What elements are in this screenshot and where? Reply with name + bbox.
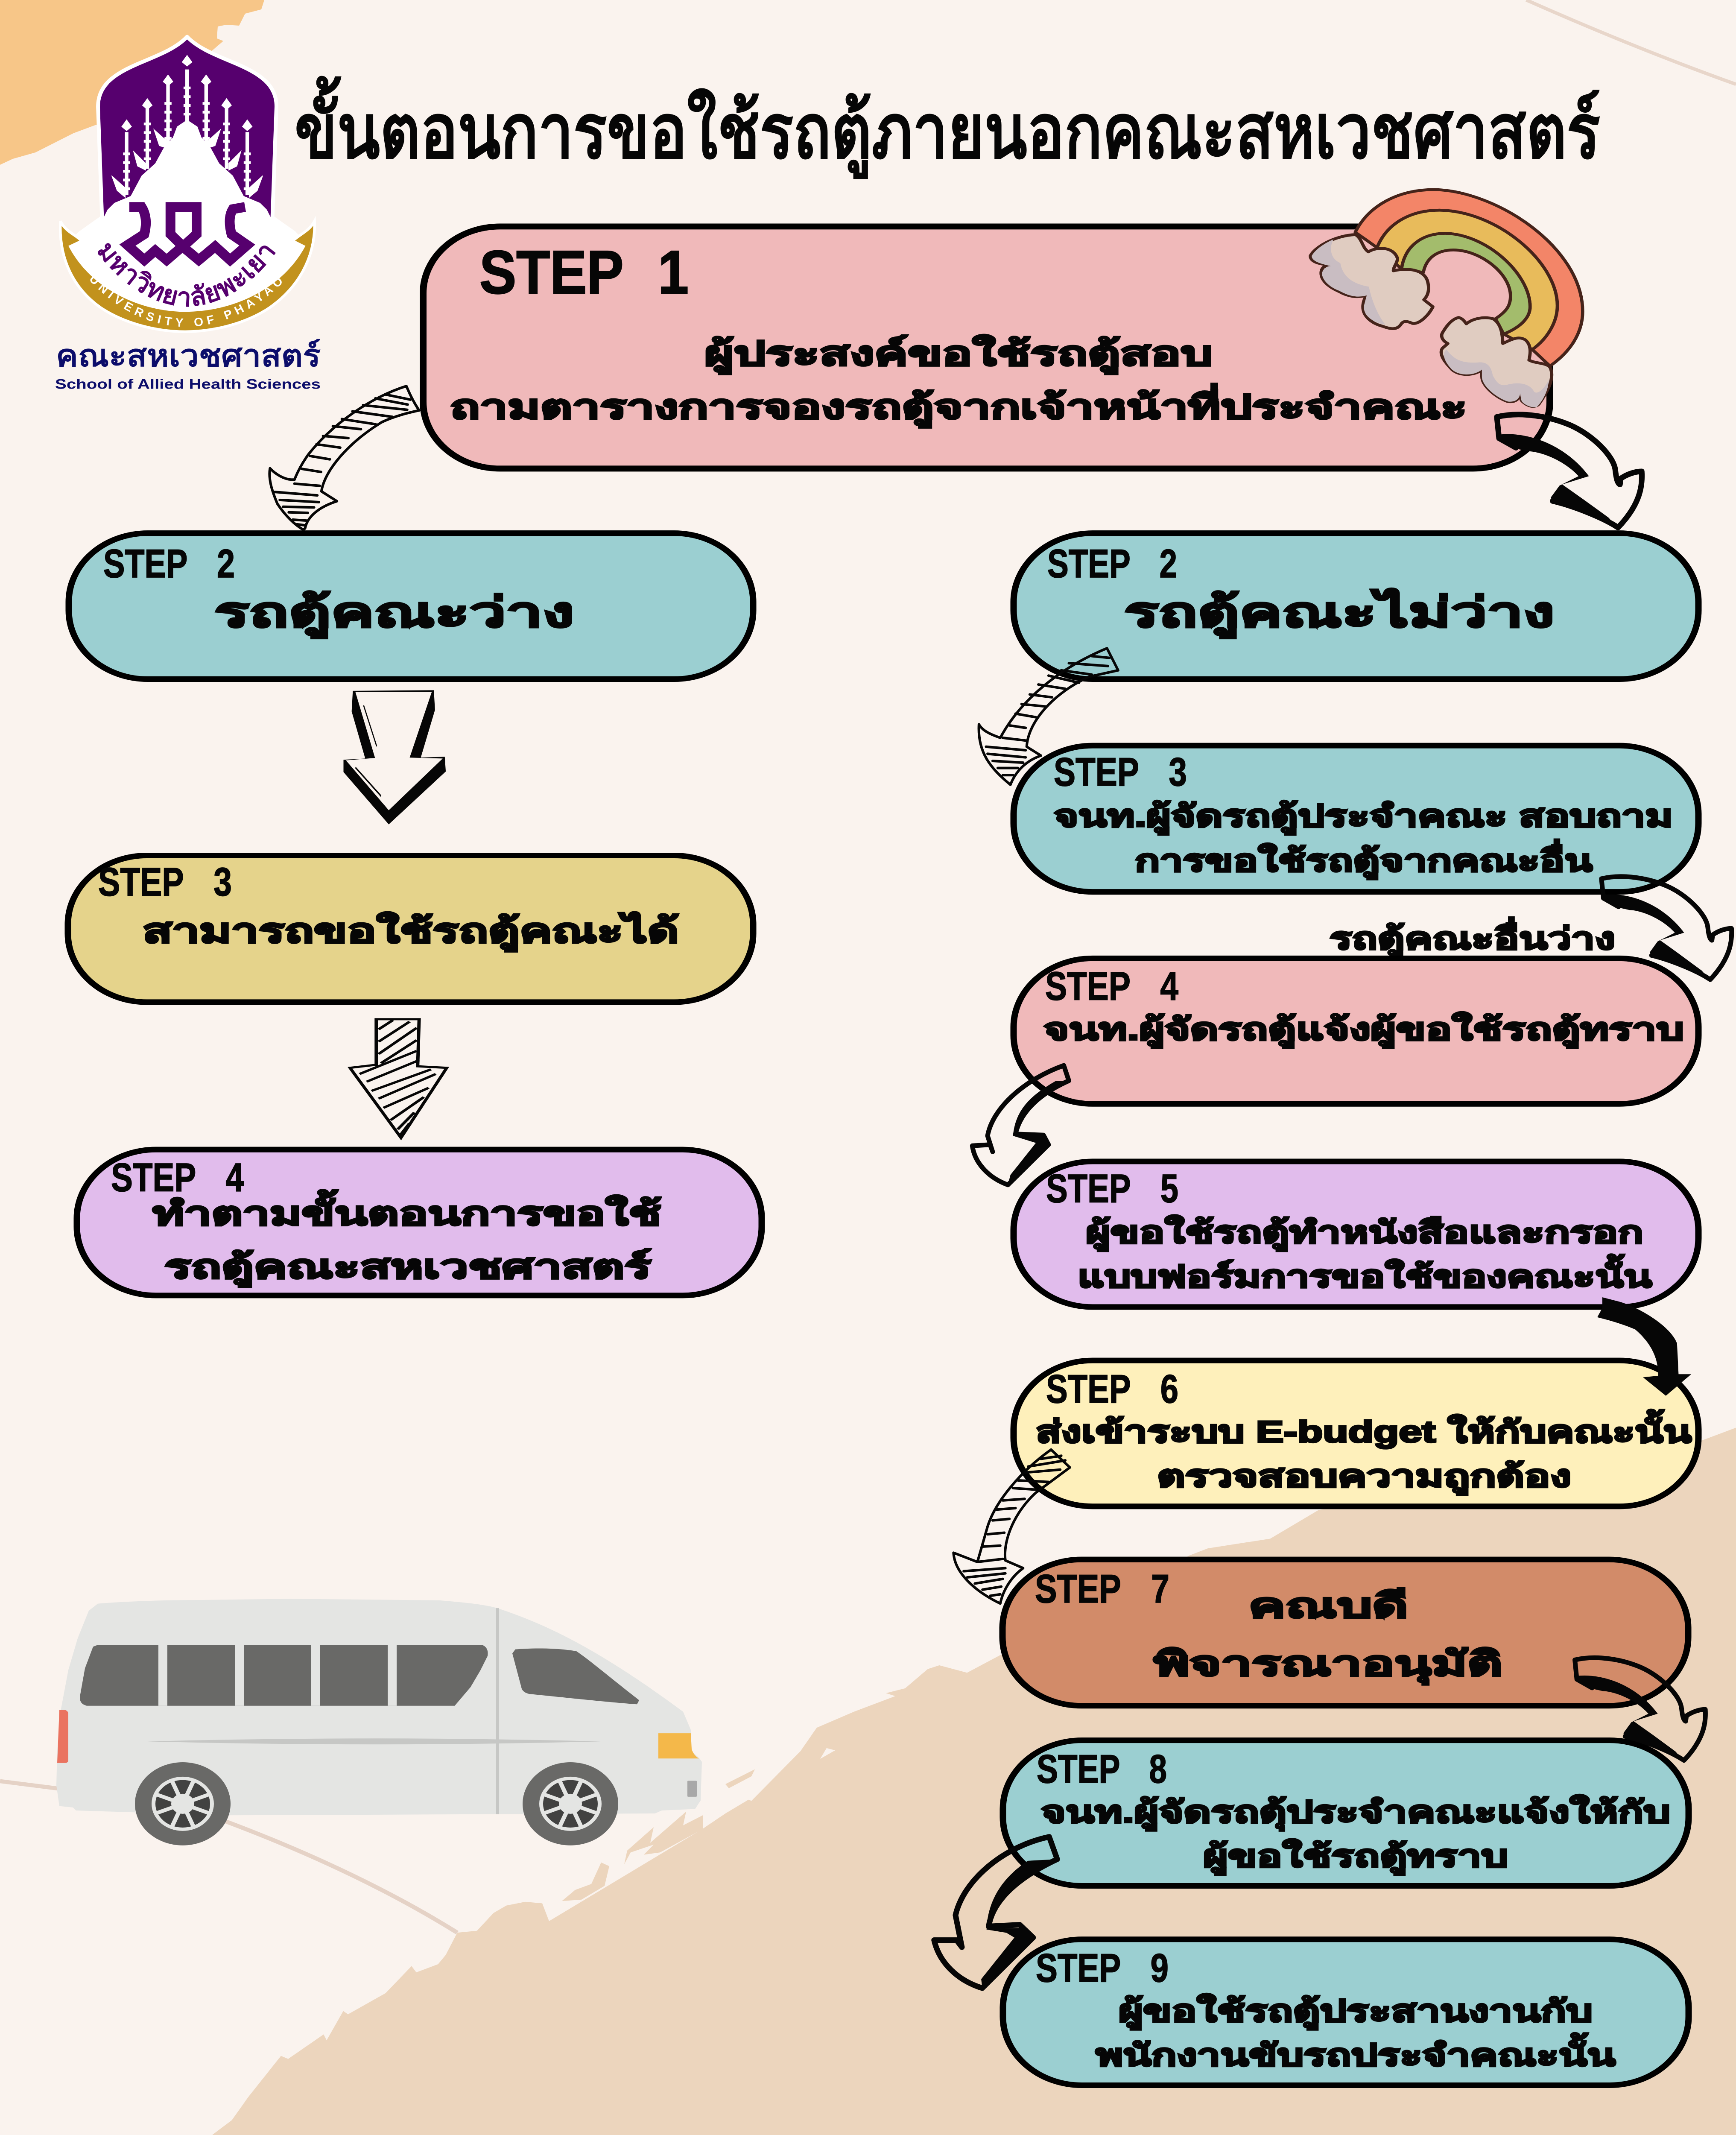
right step 7 text line 1: คณบดี bbox=[1248, 1587, 1408, 1625]
logo: university crest bbox=[60, 37, 315, 332]
right step 9 box bbox=[1003, 1939, 1689, 2085]
van body bbox=[56, 1599, 702, 1815]
step 1 text line 2: ถามตารางการจองรถตู้จากเจ้าหน้าที่ประจำคณะ bbox=[450, 383, 1467, 428]
panel: right step 5 bbox=[1014, 1161, 1698, 1307]
arrow thick edge bbox=[1498, 434, 1618, 528]
arrow thick edge bbox=[1603, 895, 1710, 980]
van front window bbox=[512, 1648, 639, 1704]
arrow: left step 3 to step 4 (sketched) bbox=[350, 1019, 447, 1138]
right step 7 label: STEP 7 bbox=[1035, 1567, 1169, 1611]
right step 4 box bbox=[1014, 958, 1698, 1104]
van side windows bbox=[80, 1645, 488, 1706]
background: orange brush top-left bbox=[0, 0, 264, 165]
logo caption: faculty name english: School of Allied Health Sciences bbox=[55, 377, 321, 392]
right step 9 text line 1: ผู้ขอใช้รถตู้ประสานงานกับ bbox=[1119, 1993, 1593, 2030]
background curve bottom-left bbox=[0, 1781, 457, 1933]
panel: right step 7 bbox=[1002, 1559, 1688, 1706]
van body stripe bbox=[147, 1738, 601, 1744]
arrow: right step 7 to step 8 (curved) bbox=[1575, 1658, 1705, 1761]
panel: left step 4 bbox=[77, 1149, 762, 1296]
right step 4 label: STEP 4 bbox=[1045, 964, 1178, 1009]
arrow: right step 4 to step 5 (curved) bbox=[972, 1065, 1069, 1185]
panel: left step 2 bbox=[69, 533, 753, 679]
arrow outline bbox=[1602, 877, 1732, 980]
left cloud shadow bbox=[1312, 239, 1385, 325]
crest ribbon bbox=[60, 221, 315, 332]
right step 6 text line 1: ส่งเข้าระบบ E-budget ให้กับคณะนั้น bbox=[1036, 1409, 1692, 1449]
van head light bbox=[658, 1733, 699, 1758]
right step 3 label: STEP 3 bbox=[1054, 750, 1187, 794]
right step 8 label: STEP 8 bbox=[1037, 1746, 1167, 1791]
crest shield bbox=[98, 37, 276, 221]
right step 6 text line 2: ตรวจสอบความถูกต้อง bbox=[1157, 1459, 1571, 1495]
left step 3 label: STEP 3 bbox=[98, 860, 232, 904]
arrow thick edge bbox=[1008, 1081, 1069, 1185]
right step 5 text line 1: ผู้ขอใช้รถตู้ทำหนังสือและกรอก bbox=[1086, 1215, 1643, 1252]
van rear wheel bbox=[135, 1762, 231, 1845]
background: tan brush bottom-right bbox=[212, 1427, 1736, 2135]
arrow: right step 3 to step 4 (curved) bbox=[1602, 877, 1732, 980]
right step 9 text line 2: พนักงานขับรถประจำคณะนั้น bbox=[1096, 2033, 1616, 2072]
panel: step 1 bbox=[423, 226, 1550, 468]
background curve top-right bbox=[1526, 0, 1736, 84]
panel: right step 8 bbox=[1003, 1740, 1689, 1886]
step 1 box bbox=[423, 226, 1550, 468]
right step 8 text line 1: จนท.ผู้จัดรถตุ้ประจำคณะแจ้งให้กับ bbox=[1041, 1794, 1670, 1831]
right step 3 box bbox=[1014, 746, 1698, 892]
right step 2 label: STEP 2 bbox=[1047, 541, 1177, 586]
van tail light bbox=[57, 1710, 68, 1763]
arrow: step 1 to left step 2 (hatched) bbox=[269, 386, 419, 530]
right step 2 text: รถตู้คณะไม่ว่าง bbox=[1124, 588, 1555, 639]
right step 2 box bbox=[1014, 533, 1698, 679]
left step 4 text line 2: รถตู้คณะสหเวชศาสตร์ bbox=[164, 1249, 651, 1287]
panel: right step 6 bbox=[1014, 1360, 1698, 1506]
right step 5 box bbox=[1014, 1161, 1698, 1307]
crest english arc text: UNIVERSITY OF PHAYAO bbox=[87, 272, 288, 330]
arrow thick edge bbox=[981, 1859, 1057, 1988]
left step 2 box bbox=[69, 533, 753, 679]
right step 4 text: จนท.ผู้จัดรถตู้แจ้งผู้ขอใช้รถตู้ทราบ bbox=[1043, 1012, 1684, 1048]
rainbow green band bbox=[1402, 234, 1530, 334]
arrow: step 1 to right step 2 (curved) bbox=[1497, 415, 1642, 528]
crest monogram bbox=[127, 207, 247, 260]
panel: right step 3 bbox=[1014, 746, 1698, 892]
arrow highlight bbox=[355, 705, 381, 796]
arrow face bbox=[346, 692, 443, 810]
right step 8 text line 2: ผู้ขอใช้รถตู้ทราบ bbox=[1203, 1838, 1508, 1875]
arrow outline bbox=[1575, 1658, 1705, 1761]
van front wheel bbox=[523, 1762, 618, 1845]
left step 2 label: STEP 2 bbox=[103, 541, 235, 586]
step 1 label: STEP 1 bbox=[479, 238, 689, 307]
right step 5 text line 2: แบบฟอร์มการขอใช้ของคณะนั้น bbox=[1078, 1254, 1652, 1294]
step 1 text line 1: ผู้ประสงค์ขอใช้รถตู้สอบ bbox=[704, 334, 1213, 374]
right cloud bbox=[1441, 317, 1552, 407]
right step 9 label: STEP 9 bbox=[1036, 1945, 1169, 1990]
right step 3 text line 1: จนท.ผู้จัดรถตู้ประจำคณะ สอบถาม bbox=[1054, 799, 1673, 835]
arrow: right step 8 to step 9 (curved) bbox=[934, 1837, 1057, 1988]
illustration: white van bbox=[56, 1599, 702, 1845]
arrow outline bbox=[972, 1065, 1069, 1185]
icon: rainbow with clouds bbox=[1310, 190, 1583, 407]
van plate bbox=[687, 1781, 697, 1797]
background speck bbox=[820, 1748, 835, 1759]
right step 6 label: STEP 6 bbox=[1046, 1367, 1178, 1412]
van window pillars bbox=[158, 1645, 397, 1706]
arrow: left step 2 to step 3 (block) bbox=[343, 690, 446, 825]
right step 3 text line 2: การขอใช้รถตู้จากคณะอื่น bbox=[1135, 839, 1593, 880]
arrow: right step 6 to step 7 (hatched) bbox=[953, 1450, 1070, 1603]
left step 3 text: สามารถขอใช้รถตู้คณะได้ bbox=[143, 912, 679, 952]
arrow outline bbox=[1497, 415, 1642, 527]
left step 4 label: STEP 4 bbox=[111, 1155, 244, 1200]
arrow: right step 5 to step 6 (solid) bbox=[1597, 1297, 1691, 1396]
left step 4 box bbox=[77, 1149, 762, 1296]
arrow shadow bbox=[343, 690, 446, 825]
crest temple silhouette bbox=[79, 120, 295, 245]
panel: right step 4 bbox=[1014, 958, 1698, 1104]
rainbow yellow band bbox=[1377, 210, 1558, 349]
left step 3 box bbox=[68, 855, 753, 1002]
left step 4 text line 1: ทำตามขั้นตอนการขอใช้ bbox=[152, 1189, 661, 1232]
arrow: right step 2 to step 3 (hatched) bbox=[979, 648, 1118, 785]
annotation: other faculty van available: รถตู้คณะอื่นว่าง bbox=[1330, 917, 1615, 958]
crest spires bbox=[111, 55, 263, 197]
left cloud bbox=[1310, 234, 1433, 329]
arrow thick edge bbox=[1576, 1676, 1684, 1761]
arrow outline bbox=[934, 1837, 1057, 1988]
panel: right step 9 bbox=[1003, 1939, 1689, 2085]
rainbow orange band bbox=[1355, 190, 1583, 366]
van door line bbox=[496, 1608, 499, 1814]
right step 8 box bbox=[1003, 1740, 1689, 1886]
crest thai arc text: มหาวิทยาลัยพะเยา bbox=[92, 236, 281, 312]
right step 7 box bbox=[1002, 1559, 1688, 1706]
panel: left step 3 bbox=[68, 855, 753, 1002]
right step 6 box bbox=[1014, 1360, 1698, 1506]
crest white ground bbox=[65, 215, 308, 313]
panel: right step 2 bbox=[1014, 533, 1698, 679]
logo caption: faculty name thai: คณะสหเวชศาสตร์ bbox=[56, 339, 321, 373]
right cloud shadow bbox=[1444, 349, 1549, 407]
right step 5 label: STEP 5 bbox=[1046, 1166, 1178, 1211]
left step 2 text: รถตู้คณะว่าง bbox=[214, 589, 574, 639]
right step 7 text line 2: พิจารณาอนุมัติ bbox=[1154, 1645, 1502, 1685]
